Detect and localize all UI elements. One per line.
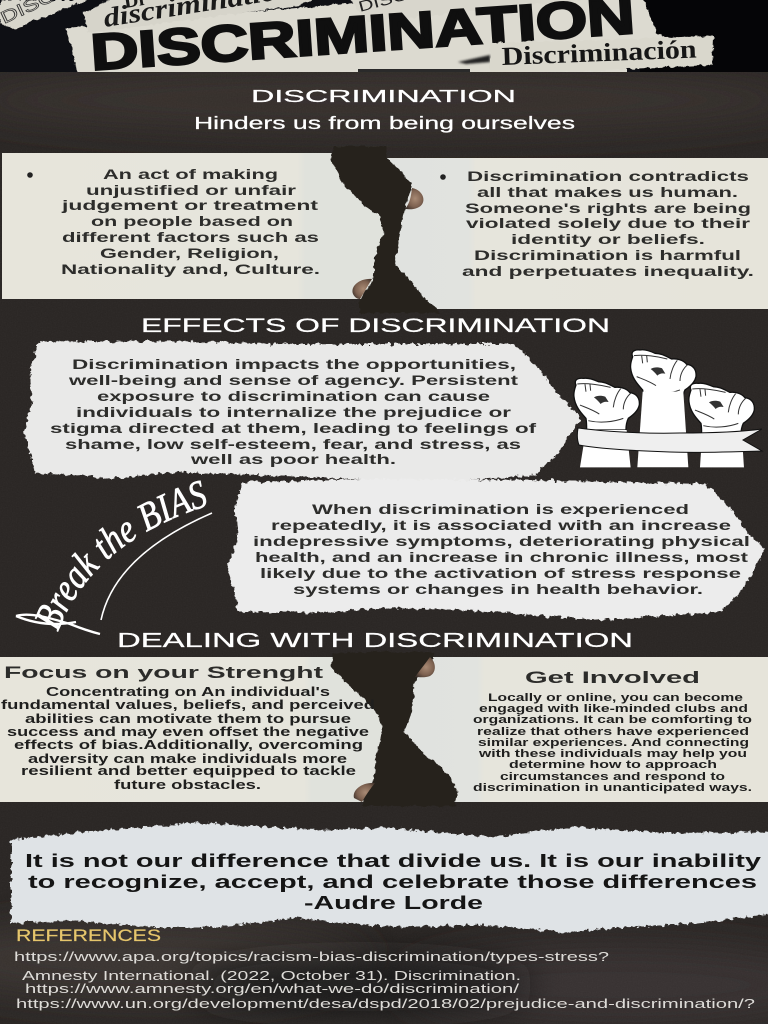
focus text: Concentrating on An individual's [46,685,330,699]
definition text: Nationality and, Culture. [61,262,320,277]
effects text 1: exposure to discrimination can cause [97,389,491,404]
effects text 2: When discrimination is experienced [312,502,689,517]
focus text [1,685,375,792]
references list: https://www.un.org/development/desa/dspd/2018/02/prejudice-and-discrimination/? [16,997,755,1011]
focus text: resilient and better equipped to tackle [21,764,356,778]
references heading: REFERENCES [16,927,161,945]
contradiction text: Discrimination is harmful [474,248,741,263]
fist right [689,383,754,467]
quote text [25,850,762,913]
focus text: adversity can make individuals more [28,752,347,766]
references list: Amnesty International. (2022, October 31). Discrimination. [22,969,521,983]
definition text: on people based on [91,214,293,229]
heading: focus: Focus on your Strenght [4,663,324,682]
definition text: An act of making [103,167,278,182]
contradiction text: and perpetuates inequality. [462,264,754,279]
contradiction text: identity or beliefs. [511,232,705,247]
get involved text: determine how to approach [509,759,717,771]
effects text 1: Discrimination impacts the opportunities, [72,357,516,372]
bullet [440,174,446,180]
focus text: success and may even offset the negative [7,725,369,739]
get involved text: organizations. It can be comforting to [473,714,752,726]
fist left [574,378,639,467]
effects text 1: well as poor health. [189,452,396,467]
contradiction text [462,169,754,279]
effects text 2: health, and an increase in chronic illness, most [255,550,749,565]
effects text 2 [253,502,750,597]
effects text 1 [50,357,537,467]
heading: effects: EFFECTS OF DISCRIMINATION [141,315,610,337]
get involved text: with these individuals may help you [478,748,747,760]
panel: definition, left [2,153,386,299]
torn rip, lower panels [331,652,458,806]
effects text 1: well-being and sense of agency. Persistent [67,373,519,388]
heading: dealing: DEALING WITH DISCRIMINATION [117,630,633,652]
effects text 1: stigma directed at them, leading to feelings of [50,421,537,436]
definition text: unjustified or unfair [86,183,297,198]
contradiction text: all that makes us human. [477,185,738,200]
panel: definition, right [384,158,768,309]
get involved text: engaged with like-minded clubs and [479,703,748,715]
references list: https://www.amnesty.org/en/what-we-do/discrimination/ [25,982,520,996]
script lettering: break the bias: Break the BIAS [34,480,206,632]
get involved text: realize that others have experienced [477,726,749,738]
icon: raised fists with ribbon [574,350,762,467]
focus text: fundamental values, beliefs, and perceived [1,698,375,712]
get involved text: discrimination in unanticipated ways. [473,782,752,794]
references list: https://www.apa.org/topics/racism-bias-discrimination/types-stress? [14,950,609,964]
focus text: effects of bias.Additionally, overcoming [14,738,363,752]
torn rip, upper panels [331,146,441,313]
header photo: newspaper clippings [0,0,768,72]
bullet [27,172,33,178]
panel: effects paper 1 [24,341,581,482]
effects text 2: likely due to the activation of stress response [260,566,742,581]
references list [14,950,755,1011]
quote text: to recognize, accept, and celebrate those differences [28,871,757,892]
references [14,927,755,1011]
effects text 1: shame, low self-esteem, fear, and stress, as [65,437,521,452]
effects text 2: indepressive symptoms, deteriorating physical [253,534,750,549]
contradiction text: Someone's rights are being [465,201,751,216]
quote paper [11,823,768,932]
effects text 2: systems or changes in health behavior. [293,582,703,597]
panel: focus on your strength [0,657,395,802]
get involved text: similar experiences. And connecting [478,737,749,749]
contradiction text: Discrimination contradicts [467,169,749,184]
heading: get involved: Get Involved [525,668,700,687]
quote text: It is not our difference that divide us. It is our inability [25,850,762,871]
get involved text [473,692,752,794]
focus text: future obstacles. [114,778,261,792]
definition text [60,167,320,277]
ribbon [577,428,762,452]
effects text 1: individuals to internalize the prejudice or [76,405,512,420]
panel: get involved [395,657,768,802]
header small word: Discriminación [501,35,698,71]
contradiction text: violated solely due to their [466,216,751,231]
title: DISCRIMINATION [251,86,516,106]
fist middle [631,350,696,467]
panel: effects paper 2 [227,479,765,620]
subtitle: Hinders us from being ourselves [194,113,575,133]
get involved text: Locally or online, you can become [488,692,743,704]
get involved text: circumstances and respond to [500,771,725,783]
quote text: -Audre Lorde [304,892,483,913]
effects text 2: repeatedly, it is associated with an increase [271,518,732,533]
definition text: Gender, Religion, [100,246,279,261]
definition text: judgement or treatment [60,198,319,213]
definition text: different factors such as [62,230,319,245]
focus text: abilities can motivate them to pursue [25,712,351,726]
